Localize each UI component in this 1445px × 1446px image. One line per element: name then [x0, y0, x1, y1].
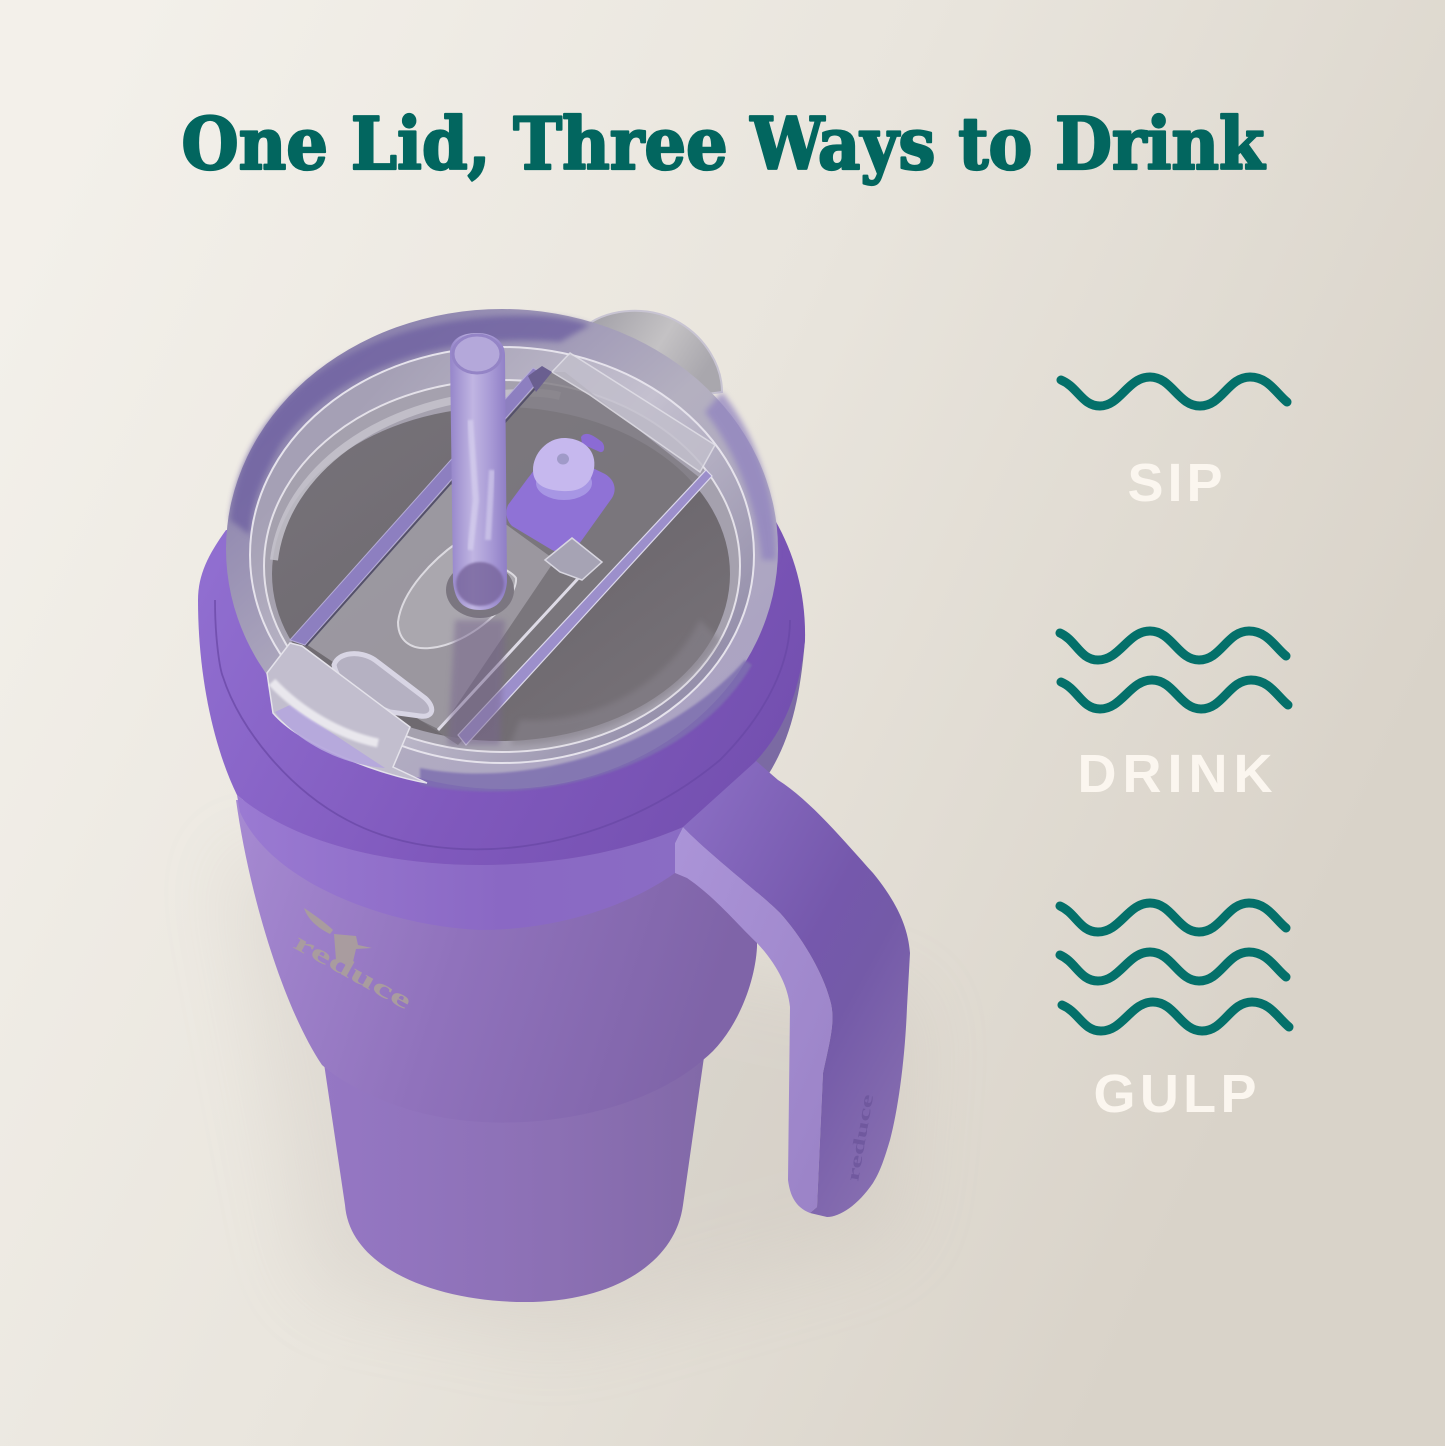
- brand logo engraving: reduce: [289, 929, 416, 1015]
- lid outer rim: [226, 309, 778, 789]
- left rail: [290, 368, 545, 645]
- straw base tint: [456, 562, 504, 606]
- collar shade behind handle: [745, 640, 805, 775]
- lower body: [322, 1050, 705, 1302]
- latch under tint: [275, 705, 385, 768]
- lid top left tint: [230, 315, 590, 535]
- top rail shadow: [528, 366, 552, 392]
- right rail: [458, 470, 712, 745]
- inner rail line: [438, 558, 597, 730]
- purple stopper: [506, 434, 615, 552]
- collar lip: [237, 795, 683, 930]
- icon: two waves: [1060, 631, 1288, 709]
- sip group: [1061, 377, 1287, 513]
- stopper plug flange: [536, 466, 592, 500]
- drink group: [1060, 631, 1288, 804]
- clear clip: [545, 538, 602, 580]
- title: One Lid, Three Ways to Drink: [182, 101, 1267, 186]
- latch highlight: [272, 682, 378, 743]
- icon: three waves: [1060, 903, 1289, 1031]
- label: DRINK: DRINK: [1078, 744, 1272, 804]
- straw tube: [450, 333, 507, 610]
- straw highlights: [470, 420, 492, 550]
- interior dark well: [272, 407, 730, 741]
- upper body: [236, 800, 757, 1123]
- label: SIP: SIP: [1128, 453, 1222, 513]
- brand logo engraving: [289, 908, 416, 1015]
- lower latch: [267, 643, 427, 783]
- stopper base: [506, 452, 615, 552]
- stopper plug: [533, 438, 594, 491]
- left rail dark edge: [306, 376, 546, 646]
- gulp group: [1060, 903, 1289, 1124]
- handle embossed brand: reduce: [843, 1092, 877, 1183]
- tumbler shadow: [225, 850, 920, 1340]
- sliding panel recess: [300, 372, 700, 745]
- lid bottom band: [420, 660, 752, 791]
- collar seat line: [215, 600, 790, 849]
- sip opening: [398, 542, 516, 648]
- lid inner ring: [264, 380, 740, 752]
- small lower tab: [334, 654, 432, 716]
- lower panel lightening: [300, 480, 555, 730]
- top rail corner: [552, 353, 715, 472]
- sip hole: [446, 562, 514, 618]
- straw: [450, 333, 507, 610]
- lid: [226, 309, 778, 791]
- lid clear ring: [250, 347, 754, 763]
- label: GULP: GULP: [1094, 1064, 1256, 1124]
- upper arc highlight: [274, 393, 560, 560]
- handle side face: [675, 827, 832, 1213]
- collar: [198, 520, 805, 865]
- straw reflection below: [448, 620, 505, 745]
- icon: one wave: [1061, 377, 1287, 406]
- handle: [675, 760, 910, 1217]
- handle top face: [683, 760, 910, 1217]
- lid tab: [587, 311, 722, 395]
- lid right tint: [705, 392, 776, 560]
- stopper nub: [581, 434, 604, 452]
- straw top opening: [453, 335, 501, 373]
- stopper hole: [557, 454, 569, 464]
- tumbler: [198, 520, 920, 1340]
- interior lower reflection: [510, 620, 720, 745]
